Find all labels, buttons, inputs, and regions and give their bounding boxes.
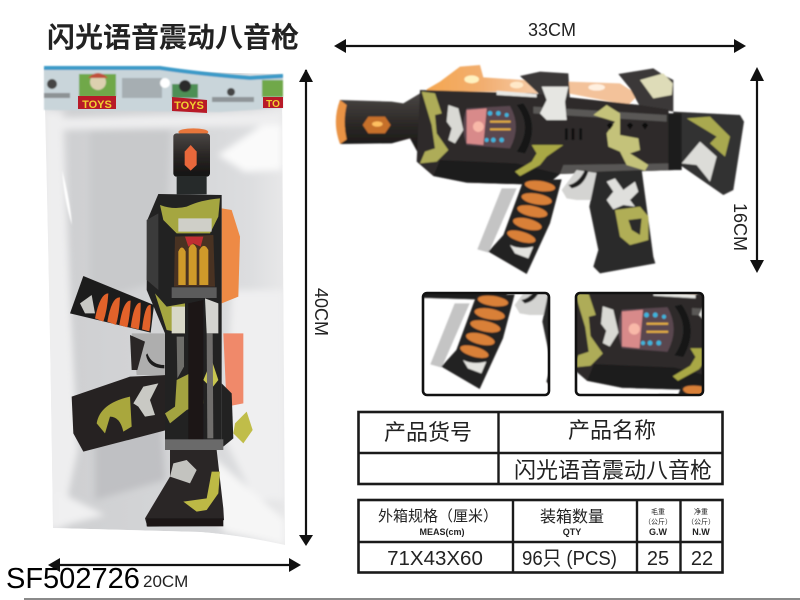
product name heading: 产品名称 — [568, 418, 656, 443]
dimension: 33CM: 33CM — [528, 20, 576, 40]
plastic bag — [44, 68, 285, 545]
grip — [72, 375, 167, 452]
gross weight heading — [644, 507, 672, 537]
net weight heading — [687, 507, 715, 537]
toys labels — [78, 96, 283, 113]
net weight value: 22 — [691, 548, 713, 570]
stock — [145, 450, 224, 527]
muzzle — [338, 93, 420, 157]
dimension: 16CM — [730, 67, 764, 273]
receiver — [147, 194, 222, 440]
gross weight heading: G.W — [649, 527, 668, 537]
sights — [520, 72, 570, 100]
net weight heading: 净重 — [694, 507, 708, 516]
toys labels: TOYS — [174, 100, 204, 112]
camouflage — [155, 293, 185, 333]
camouflage — [420, 92, 448, 163]
receiver — [417, 90, 675, 185]
product code heading: 产品货号 — [384, 420, 472, 445]
muzzle — [178, 128, 208, 136]
table: carton info — [358, 500, 723, 573]
product in bag photo — [44, 66, 285, 545]
quantity heading: 装箱数量 — [540, 508, 604, 526]
stock — [673, 112, 744, 195]
pistol grip — [589, 170, 655, 273]
dimension: 33CM — [334, 20, 746, 53]
toys labels: TO — [266, 99, 280, 110]
carton size value: 71X43X60 — [387, 547, 483, 570]
quantity value: 96只 (PCS) — [522, 548, 617, 570]
drum window — [463, 106, 516, 148]
magazine — [477, 188, 517, 253]
gross weight heading: （公斤） — [644, 517, 672, 526]
item code: SF502726 — [6, 563, 140, 595]
receiver details — [565, 122, 648, 140]
orange top rail — [427, 65, 540, 95]
gross weight heading: 毛重 — [651, 507, 665, 516]
carton size heading — [378, 508, 498, 537]
orange side rail — [222, 208, 240, 303]
net weight heading: N.W — [692, 527, 710, 537]
bag header card — [44, 66, 283, 112]
bullets window — [174, 235, 215, 287]
trigger guard — [562, 170, 598, 200]
gross weight value: 25 — [647, 548, 669, 570]
net weight heading: （公斤） — [687, 517, 715, 526]
dimension: 20CM — [48, 558, 301, 591]
dimension: 20CM: 20CM — [143, 572, 188, 591]
table: product info — [358, 412, 723, 484]
toys labels: TOYS — [82, 99, 112, 111]
dimension: 16CM: 16CM — [730, 203, 750, 251]
main toy gun photo — [336, 65, 744, 274]
carton size heading: MEAS(cm) — [419, 527, 465, 537]
toy gun in bag — [70, 128, 253, 527]
product name value: 闪光语音震动八音枪 — [514, 458, 712, 483]
quantity heading — [540, 508, 604, 537]
trigger guard — [132, 333, 165, 375]
carton size heading: 外箱规格（厘米） — [378, 508, 498, 525]
inset: magazine detail — [422, 292, 550, 396]
magazine — [70, 276, 154, 333]
title: 闪光语音震动八音枪 — [47, 22, 299, 53]
quantity heading: QTY — [563, 527, 581, 537]
dimension: 40CM: 40CM — [311, 288, 331, 336]
frame line — [24, 598, 800, 600]
dimension: 40CM — [299, 69, 331, 546]
inset: drum detail — [574, 292, 704, 396]
